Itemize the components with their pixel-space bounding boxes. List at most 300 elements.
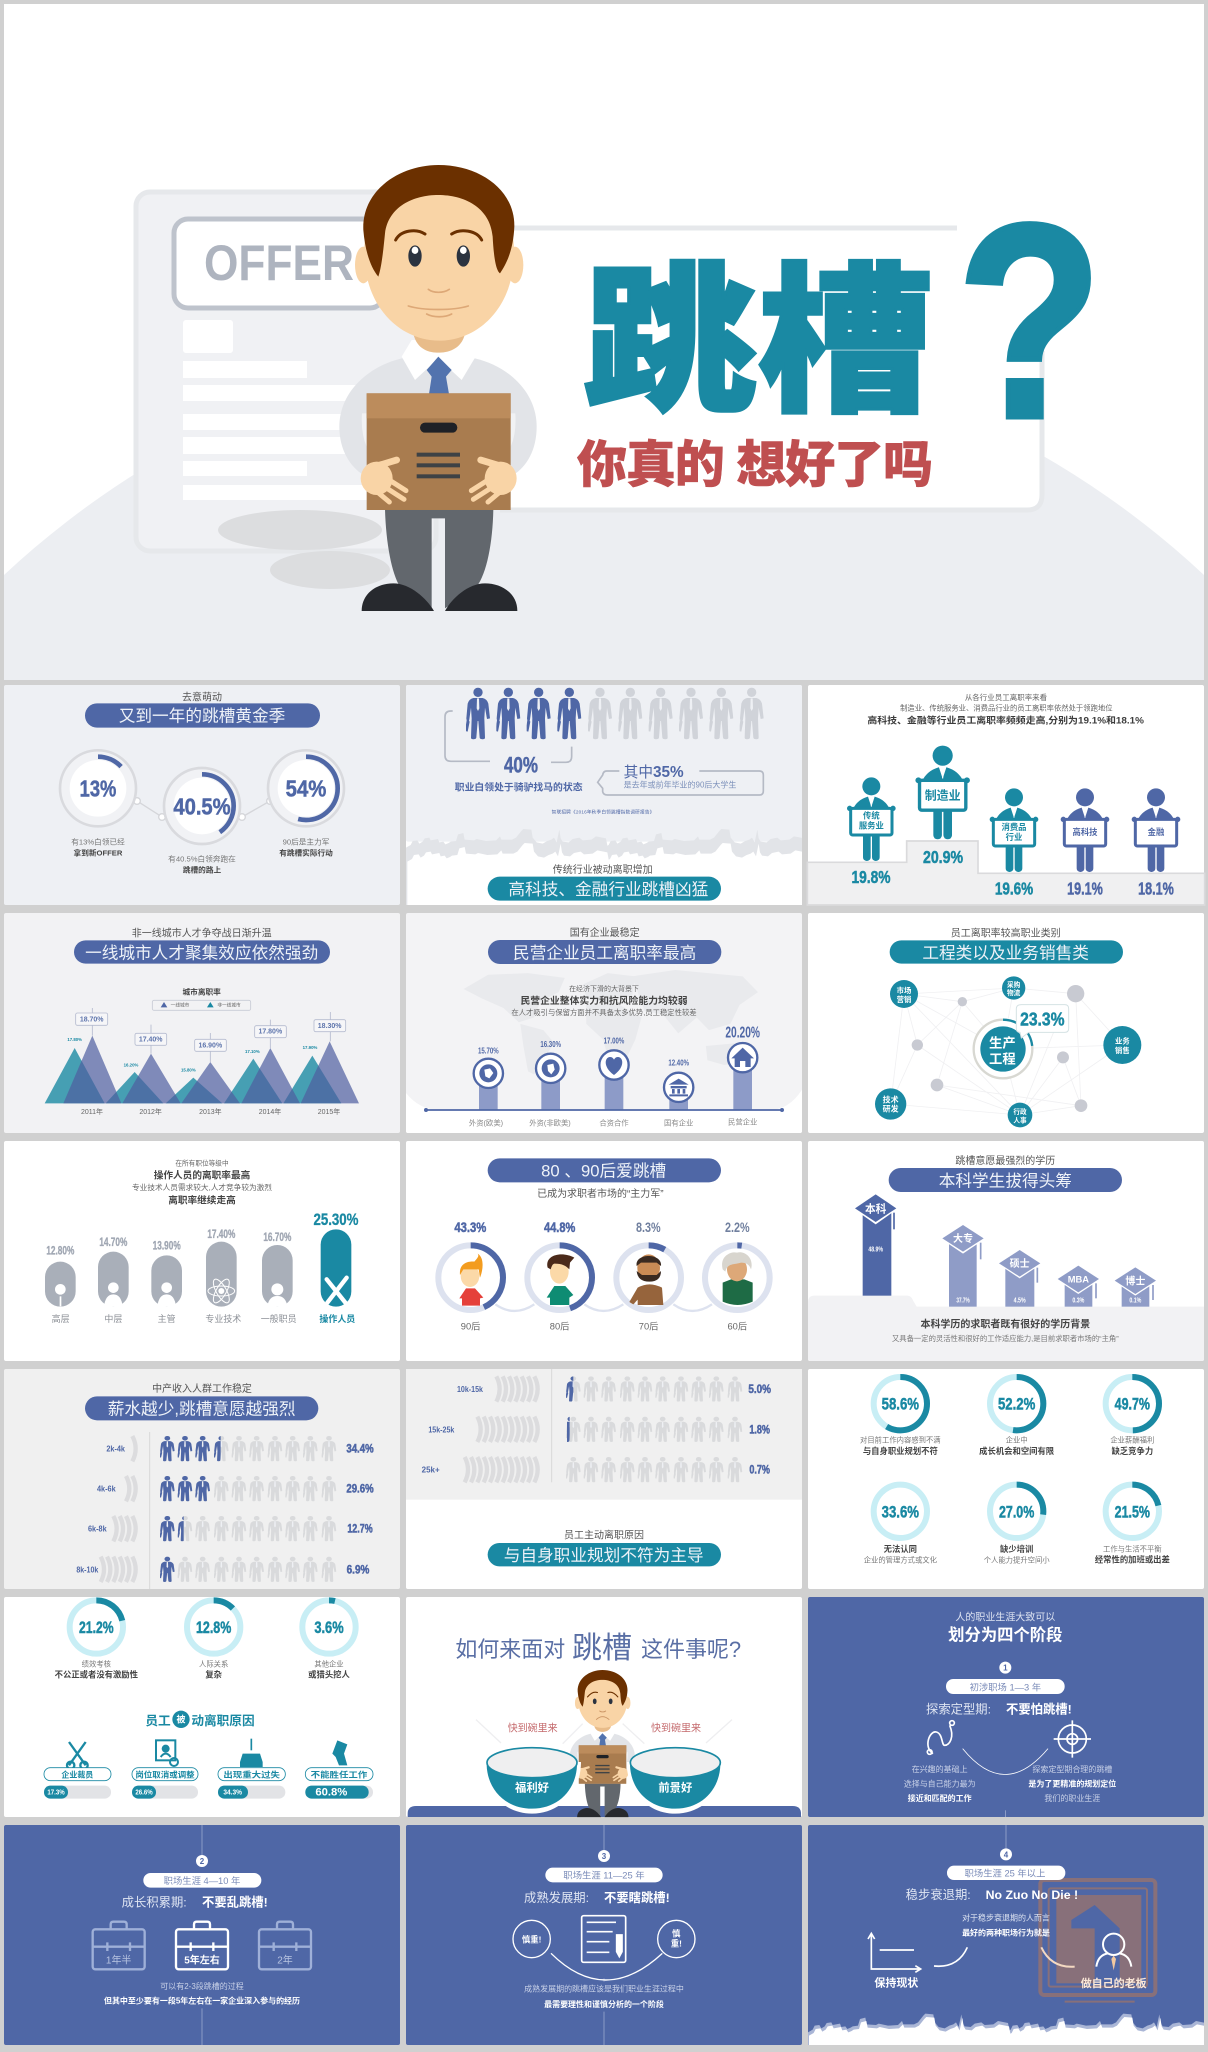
axis [426, 1107, 782, 1112]
text block: 制造业、传统服务业、消费品行业的员工离职率依然处于领跑地位 [900, 703, 1113, 712]
years: 2012年 [139, 1107, 162, 1116]
heading: 高科技、金融行业跳槽凶猛 [508, 880, 708, 899]
subheading: 动离职原因 [191, 1713, 255, 1728]
title card [430, 228, 1042, 510]
heading: 已成为求职者市场的“主力军” [537, 1187, 664, 1200]
briefcase labels: 5年左右 [184, 1953, 220, 1966]
years: 2013年 [199, 1107, 222, 1116]
values: 8.3% [636, 1219, 661, 1235]
text [962, 1913, 1050, 1937]
labels: 国有企业 [664, 1118, 693, 1127]
subtitle: 你真的 想好了吗 [577, 437, 933, 493]
bar 博士: 0.1% [1129, 1295, 1142, 1304]
stat 40%: 40% [504, 752, 538, 777]
bar 本科 [853, 1193, 898, 1296]
stage title: No Zuo No Die ! [986, 1888, 1078, 1902]
board labels: 传统 [863, 810, 880, 820]
node labels [883, 980, 1130, 1124]
panel: 操作人员的离职率最高 [4, 1141, 400, 1361]
blue values: 18.30% [318, 1023, 342, 1030]
right text: 探索定型期合理的跳槽 [1032, 1764, 1112, 1774]
chart icon [868, 1933, 967, 1972]
main title: 跳槽 [582, 252, 932, 432]
captions: 有跳槽实际行动 [279, 848, 333, 858]
ring tracks [70, 1600, 356, 1654]
person icon [1041, 1934, 1131, 1970]
panel: 员工被动离职原因 [4, 1597, 400, 1817]
panel: stage 4 [808, 1825, 1208, 2052]
board labels: 金融 [1148, 827, 1165, 837]
row 10k-15k: 5.0% [748, 1382, 771, 1396]
heading: 员工离职率较高职业类别 [951, 926, 1061, 939]
text block: 在人才吸引与保留方面并不具备太多优势,员工稳定性较差 [511, 1008, 697, 1017]
text block: 又具备一定的灵活性和很好的工作适应能力,是目前求职者市场的“主角” [892, 1334, 1119, 1343]
row 8k-10k: 6.9% [347, 1562, 370, 1576]
teal values [67, 1037, 317, 1073]
heading: 传统行业被动离职增加 [553, 863, 653, 876]
years: 2015年 [318, 1107, 340, 1116]
step number [196, 1855, 208, 1867]
bowl left [483, 1748, 581, 1814]
captions: 缺少培训 [1000, 1544, 1033, 1554]
text block [511, 984, 697, 1017]
values: 20.9% [923, 847, 963, 867]
node labels: 采购 [1007, 980, 1021, 989]
labels: 60后 [727, 1321, 747, 1331]
ring arcs [874, 1377, 1159, 1538]
callout 35% [598, 764, 763, 795]
teal values: 17.90% [303, 1045, 317, 1050]
bar 博士 [1113, 1266, 1158, 1307]
blue values: 17.80% [258, 1029, 283, 1036]
world map [464, 970, 758, 1074]
values: 13.90% [153, 1238, 181, 1252]
source: 智联招聘《2016年秋季白领跳槽指数调研报告》 [552, 808, 654, 815]
row 15k-25k [428, 1417, 770, 1442]
option labels: 做自己的老板 [1081, 1976, 1147, 1990]
row 25k+: 25k+ [422, 1466, 440, 1475]
values: 19.6% [995, 878, 1033, 898]
left text: 接近和匹配的工作 [908, 1793, 972, 1803]
values: 17.00% [604, 1036, 625, 1046]
panel: 四个阶段 stage 1 [808, 1597, 1204, 1817]
text block: 专业技术人员需求较大,人才竞争较为激烈 [132, 1182, 272, 1192]
side circles: 慎重! [522, 1934, 541, 1944]
bottom white [406, 1090, 802, 1133]
bar 本科: 本科 [865, 1202, 887, 1215]
text: 可以有2-3段跳槽的过程 [160, 1981, 244, 1991]
chart title and legend: 一线城市 [171, 1002, 190, 1009]
gray nodes [912, 985, 1087, 1112]
text: 成熟发展期的跳槽应该是我们职业生涯过程中 [524, 1984, 684, 1994]
subheading [145, 1711, 255, 1728]
panel: 城市离职率 [4, 913, 400, 1133]
ring 13% [60, 750, 136, 826]
row 4k-6k: 4k-6k [97, 1485, 116, 1494]
stage title: 探索定型期: [926, 1702, 991, 1716]
progress values: 60.8% [315, 1786, 347, 1798]
step number: 2 [200, 1857, 205, 1866]
years: 2011年 [81, 1107, 103, 1116]
captions: 企业薪酬福利 [1110, 1436, 1154, 1445]
values: 16.70% [263, 1230, 292, 1244]
values: 19.8% [851, 867, 890, 887]
avatar 60后 [722, 1252, 753, 1305]
text: 最好的两种职场行为就是 [962, 1927, 1050, 1937]
labels: 操作人员 [319, 1313, 355, 1324]
rings [438, 1245, 770, 1310]
watermark [1040, 1880, 1155, 2002]
values: 21.2% [79, 1618, 114, 1637]
labels: 主管 [158, 1313, 176, 1324]
links [495, 1304, 712, 1311]
axis [550, 1369, 553, 1482]
tag labels [61, 1769, 367, 1779]
text block: 从各行业员工离职率来看 [965, 692, 1048, 702]
captions: 缺乏竞争力 [1112, 1446, 1153, 1456]
teal values: 16.20% [124, 1063, 138, 1068]
captions: 不公正或者没有激励性 [55, 1670, 139, 1680]
text block: 在经济下滑的大背景下 [569, 984, 639, 993]
values: 43.3% [454, 1219, 487, 1235]
values: 15.70% [478, 1046, 499, 1056]
text block: 本科学历的求职者既有很好的学历背景 [920, 1317, 1090, 1330]
bars [45, 1242, 293, 1307]
bar icons [474, 1043, 757, 1102]
node labels: 技术 [883, 1094, 899, 1104]
row 2k-4k [106, 1436, 374, 1461]
connectors [134, 798, 273, 820]
bar 硕士: 4.5% [1014, 1295, 1026, 1304]
teal values: 17.10% [245, 1049, 260, 1054]
axis [148, 1432, 151, 1589]
heading: 本科学生拔得头筹 [939, 1171, 1072, 1190]
row 4k-6k: 29.6% [346, 1482, 374, 1496]
captions [860, 1436, 1170, 1565]
blue values: 18.70% [80, 1017, 104, 1024]
offer card: OFFER [204, 235, 354, 291]
text block [867, 692, 1145, 726]
pill [947, 1866, 1065, 1880]
board labels: 行业 [1006, 832, 1022, 842]
panel: 80、90后爱跳槽 [406, 1141, 802, 1361]
panel: hero [4, 4, 1204, 680]
side circles: 慎 [672, 1929, 681, 1939]
skyline [808, 2014, 1204, 2045]
bar 硕士: 硕士 [1010, 1257, 1030, 1270]
step number: 3 [602, 1852, 607, 1861]
heading [85, 1382, 318, 1420]
icons [927, 1720, 1091, 1774]
base [808, 1296, 1204, 1361]
row 25k+ [422, 1457, 770, 1482]
heading: 非一线城市人才争夺战日渐升温 [132, 926, 272, 939]
heading [74, 926, 330, 964]
values: 3.6% [314, 1618, 344, 1637]
ring 54%: 54% [286, 776, 326, 802]
heading: 薪水越少,跳槽意愿越强烈 [108, 1400, 296, 1419]
teal values: 15.80% [181, 1068, 196, 1073]
values [79, 1618, 344, 1637]
progress fills [44, 1786, 369, 1799]
captions: 成长机会和空间有限 [979, 1446, 1055, 1456]
ring 40.5%: 40.5% [173, 793, 231, 819]
bar MBA [1056, 1264, 1101, 1307]
stage title: 不要乱跳槽! [202, 1895, 268, 1910]
progress values: 34.3% [223, 1788, 242, 1797]
panel: 如何来面对跳槽 [406, 1597, 802, 1817]
briefcase labels: 1年半 [106, 1953, 131, 1966]
values: 14.70% [99, 1235, 128, 1249]
teal values: 17.80% [67, 1037, 82, 1042]
board labels: 制造业 [925, 788, 961, 803]
labels: 高层 [52, 1313, 70, 1324]
captions: 与自身职业规划不符 [863, 1446, 938, 1456]
values: 27.0% [999, 1502, 1034, 1521]
node labels: 业务 [1115, 1037, 1130, 1046]
row 25k+: 0.7% [749, 1463, 770, 1477]
labels [461, 1321, 747, 1331]
heading: 员工主动离职原因 [564, 1529, 644, 1542]
captions: 有13%白领已经 [71, 836, 125, 846]
bar icons [55, 1277, 347, 1307]
data callouts [76, 1008, 346, 1062]
heading [488, 863, 721, 901]
captions [71, 836, 333, 875]
labels [469, 1118, 757, 1127]
center node [974, 1020, 1032, 1078]
pill [946, 1679, 1065, 1694]
ground arc [4, 338, 1204, 680]
panel: 与自身职业规划不符为主导 [406, 1369, 802, 1589]
heading [85, 691, 320, 728]
man shadow [218, 510, 390, 589]
bar 博士: 博士 [1125, 1274, 1145, 1287]
briefcases [93, 1922, 311, 1969]
values: 44.8% [544, 1219, 576, 1235]
stat 40% [455, 752, 583, 793]
subheading: 员工 [145, 1714, 171, 1728]
bar MBA: MBA [1068, 1275, 1089, 1285]
progress tracks [44, 1786, 373, 1799]
left text: 选择与自己能力最为 [904, 1778, 976, 1788]
text: 但其中至少要有一段5年左右在一家企业深入参与的经历 [104, 1996, 300, 2006]
bowl right: 前景好 [658, 1781, 692, 1795]
panel: 工程类以及业务销售类 [808, 913, 1204, 1133]
title: 跳槽 [572, 1632, 632, 1665]
values: 12.40% [668, 1057, 689, 1067]
heading [948, 1610, 1062, 1644]
step number [999, 1662, 1011, 1674]
captions [55, 1659, 350, 1680]
years [81, 1107, 340, 1116]
step number [598, 1850, 610, 1862]
captions: 拿到新OFFER [74, 848, 123, 858]
tag labels: 不能胜任工作 [311, 1769, 367, 1779]
values: 17.40% [207, 1227, 236, 1241]
progress values: 17.3% [47, 1788, 65, 1797]
board labels: 高科技 [1072, 827, 1098, 837]
bars [479, 1066, 752, 1110]
captions: 对目前工作内容感到不满 [860, 1436, 941, 1445]
heading: 与自身职业规划不符为主导 [504, 1546, 704, 1565]
bar 大专: 37.7% [956, 1295, 970, 1304]
captions: 工作与生活不平衡 [1103, 1544, 1162, 1553]
labels: 80后 [550, 1321, 570, 1331]
center node: 生产 [989, 1035, 1016, 1051]
heading: 民营企业员工离职率最高 [513, 943, 696, 962]
captions: 个人能力提升空间小 [984, 1556, 1050, 1565]
values: 21.5% [1115, 1502, 1150, 1521]
row 10k-15k: 10k-15k [457, 1385, 483, 1394]
text block [892, 1317, 1119, 1343]
text: 最需要理性和谨慎分析的一个阶段 [544, 1999, 664, 2009]
pill: 初涉职场 1—3 年 [970, 1681, 1041, 1692]
character with box [339, 165, 537, 611]
values: 18.1% [1138, 878, 1174, 898]
labels: 民营企业 [728, 1118, 757, 1127]
heading [488, 1158, 721, 1200]
labels: 90后 [461, 1321, 481, 1331]
node labels: 销售 [1115, 1046, 1130, 1055]
step number: 4 [1004, 1850, 1009, 1859]
sad man [570, 1670, 635, 1817]
step number [1000, 1848, 1012, 1860]
bar 大专 [940, 1223, 986, 1307]
center node: 工程 [989, 1051, 1016, 1066]
values [851, 847, 1174, 898]
title: 如何来面对 [455, 1637, 565, 1662]
progress values [47, 1786, 347, 1798]
pill [143, 1873, 261, 1888]
ring arcs [70, 1600, 356, 1654]
tag labels: 出现重大过失 [223, 1769, 280, 1779]
blue values [80, 1017, 342, 1050]
stat 40%: 职业白领处于骑驴找马的状态 [455, 780, 583, 793]
board labels: 消费品 [1001, 822, 1026, 832]
row 8k-10k: 8k-10k [76, 1565, 99, 1574]
captions: 企业的管理方式或文化 [864, 1556, 938, 1565]
row 6k-8k: 12.7% [347, 1522, 373, 1536]
document [582, 1916, 626, 1962]
heading [488, 926, 721, 964]
right text: 我们的职业生涯 [1044, 1793, 1100, 1803]
heading: 划分为四个阶段 [948, 1625, 1062, 1644]
captions: 经常性的加班或出差 [1095, 1555, 1170, 1565]
briefcase labels: 2年 [277, 1953, 293, 1966]
callout 35%: 是去年或前年毕业的90后大学生 [624, 780, 736, 790]
left text: 在兴趣的基础上 [912, 1764, 968, 1774]
skyline [406, 829, 802, 905]
callout 23.3%: 23.3% [1020, 1009, 1065, 1030]
heading [890, 926, 1123, 964]
briefcase labels [106, 1953, 293, 1966]
chart title and legend [152, 987, 251, 1010]
panel: 又到一年的跳槽黄金季 [4, 685, 400, 905]
captions: 无法认同 [884, 1544, 917, 1554]
heading: 工程类以及业务销售类 [922, 943, 1089, 962]
values: 16.30% [540, 1039, 561, 1049]
labels: 专业技术 [205, 1313, 241, 1324]
captions: 或猎头挖人 [308, 1670, 350, 1680]
labels: 中层 [104, 1313, 122, 1324]
captions: 90后是主力军 [283, 836, 330, 846]
board labels: 服务业 [859, 821, 884, 831]
pill: 职场生涯 11—25 年 [563, 1870, 645, 1881]
node labels: 研发 [883, 1104, 899, 1114]
row 2k-4k: 34.4% [346, 1442, 374, 1456]
values: 2.2% [725, 1219, 750, 1235]
tag labels: 企业裁员 [61, 1769, 93, 1779]
avatar 90后 [459, 1254, 483, 1306]
tag labels: 岗位取消或调整 [135, 1769, 195, 1779]
years: 2014年 [259, 1107, 281, 1116]
right text: 是为了更精准的规划定位 [1028, 1778, 1116, 1788]
figures [847, 746, 1180, 872]
question mark: ? [957, 166, 1103, 476]
bowl left: 福利好 [515, 1781, 549, 1795]
text block: 民营企业整体实力和抗风险能力均较弱 [520, 994, 688, 1007]
pill [545, 1868, 663, 1882]
text [104, 1981, 300, 2006]
progress values: 26.6% [135, 1788, 153, 1797]
captions: 跳槽的路上 [183, 865, 221, 875]
values: 19.1% [1067, 878, 1103, 898]
text block: 离职率继续走高 [168, 1194, 236, 1206]
captions: 有40.5%白领奔跑在 [168, 853, 236, 863]
rays [476, 1720, 732, 1744]
captions: 其他企业 [314, 1659, 344, 1668]
panel: 行业离职率 [807, 685, 1205, 905]
labels: 70后 [639, 1321, 659, 1331]
values: 49.7% [1115, 1395, 1150, 1414]
row 10k-15k [457, 1376, 771, 1402]
text [524, 1984, 684, 2009]
heading: 人的职业生涯大致可以 [955, 1610, 1055, 1623]
panel: 本科学生拔得头筹 [808, 1141, 1204, 1361]
panel: 主动离职原因 rings [808, 1369, 1204, 1589]
avatar 70后 [629, 1254, 663, 1305]
row 6k-8k: 6k-8k [88, 1525, 107, 1534]
bar MBA: 0.3% [1072, 1295, 1085, 1304]
side circles: 重! [671, 1939, 682, 1949]
ring 13%: 13% [80, 776, 116, 802]
teal nodes [875, 976, 1141, 1127]
heading: 中产收入人群工作稳定 [152, 1382, 252, 1395]
node labels: 物流 [1007, 988, 1021, 997]
stage title: 稳步衰退期: [906, 1888, 971, 1902]
ring tracks [874, 1377, 1159, 1538]
node labels: 行政 [1013, 1107, 1027, 1116]
captions: 企业中 [1006, 1436, 1028, 1445]
title: 这件事呢? [641, 1637, 741, 1662]
panel: stage 2 [4, 1825, 400, 2045]
heading: 又到一年的跳槽黄金季 [119, 707, 286, 726]
subheading: 被 [177, 1714, 186, 1725]
bowl labels [508, 1722, 701, 1735]
tags [44, 1768, 373, 1781]
row 15k-25k: 1.8% [749, 1422, 770, 1436]
node labels: 营销 [897, 995, 912, 1004]
values: 12.80% [46, 1243, 75, 1257]
stage title: 不要怕跳槽! [1006, 1701, 1072, 1716]
values: 20.20% [725, 1025, 760, 1042]
option labels [874, 1976, 1147, 1990]
values: 33.6% [882, 1502, 919, 1521]
floor [408, 1806, 801, 1817]
right text [1028, 1764, 1116, 1803]
values [454, 1219, 750, 1235]
